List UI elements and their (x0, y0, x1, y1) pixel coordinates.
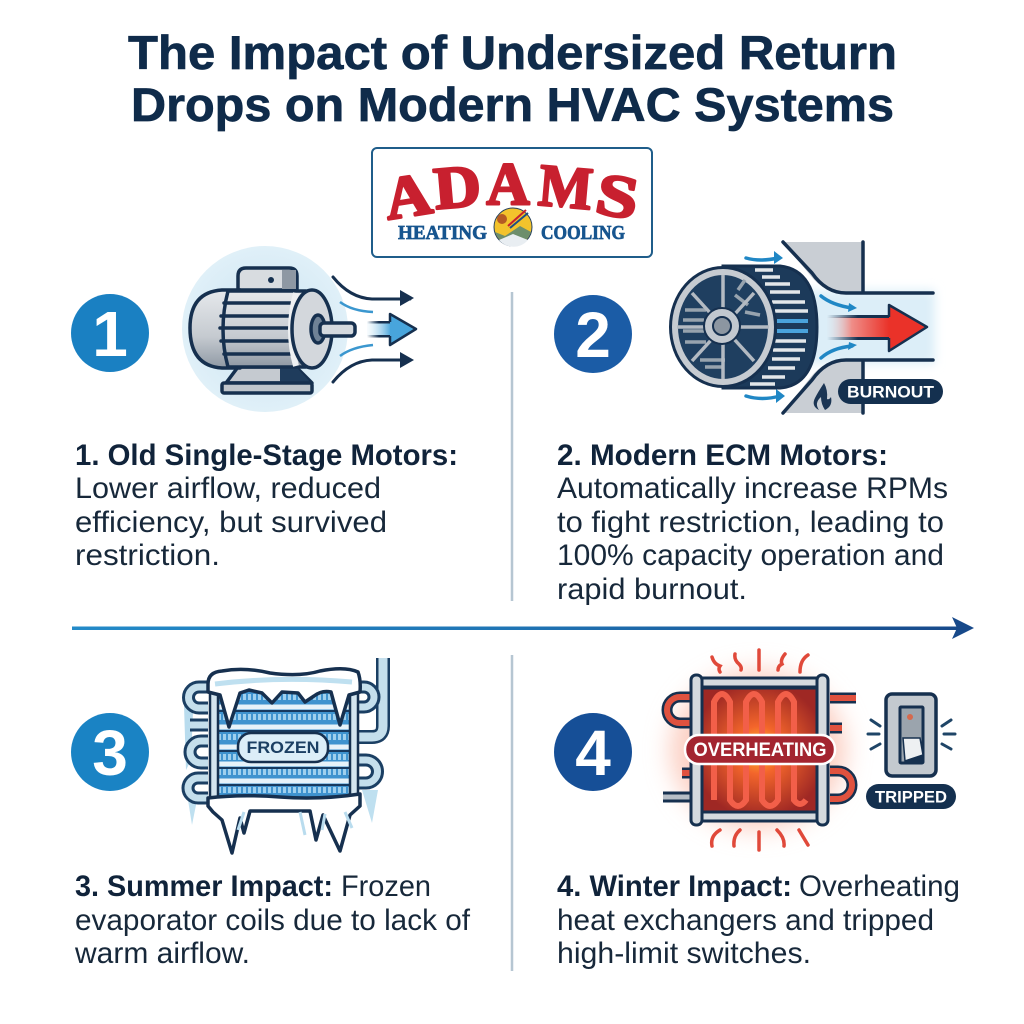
text block 4: high-limit switches. (557, 937, 811, 970)
logo: Adams Heating Cooling: HEATING (398, 222, 487, 244)
arrow: timeline (72, 617, 974, 639)
label: overheating (685, 735, 835, 764)
logo: Adams Heating Cooling: A (379, 159, 436, 233)
label: overheating: OVERHEATING (694, 740, 826, 761)
title (128, 26, 897, 131)
logo: Adams Heating Cooling: M (536, 152, 595, 223)
text block 4: heat exchangers and tripped (557, 904, 934, 937)
text block 2: 2. Modern ECM Motors: (557, 439, 888, 472)
label: tripped: TRIPPED (875, 788, 947, 806)
text block 3: warm airflow. (74, 937, 250, 970)
panel: modern ECM motors (554, 242, 948, 606)
logo: Adams Heating Cooling (372, 148, 652, 257)
label: burnout (838, 379, 943, 404)
number badge 3 (71, 713, 149, 791)
logo: Adams Heating Cooling: A (486, 151, 530, 217)
icon: overheating heat exchanger (663, 650, 856, 850)
icon: blower wheel in restricted duct (669, 242, 943, 413)
text block 4: Overheating (799, 870, 960, 903)
logo: Adams Heating Cooling: COOLING (541, 222, 625, 244)
text block 4: 4. Winter Impact: (557, 870, 792, 903)
text block 2 (557, 439, 948, 606)
logo emblem (494, 208, 532, 247)
text block 4 (557, 870, 960, 970)
number badge 1 (71, 294, 149, 372)
logo: Adams Heating Cooling: D (431, 151, 483, 222)
title: The Impact of Undersized Return (128, 26, 897, 79)
text block 2: rapid burnout. (557, 573, 747, 606)
dividers (511, 292, 513, 971)
text block 1: 1. Old Single-Stage Motors: (75, 439, 458, 472)
icon: electric motor with airflow (182, 246, 416, 412)
number badge 2 (554, 295, 632, 373)
text block 1: efficiency, but survived (75, 506, 387, 539)
panel: old single-stage motors (71, 246, 458, 572)
text block 2: 100% capacity operation and (557, 539, 944, 572)
number badge 3: 3 (92, 717, 128, 789)
label: frozen (238, 733, 328, 762)
text block 1: restriction. (75, 539, 220, 572)
number badge 2: 2 (575, 299, 611, 371)
text block 3: Frozen (341, 870, 431, 903)
icon: flame (814, 383, 831, 410)
label: frozen: FROZEN (246, 738, 320, 757)
text block 2: to fight restriction, leading to (557, 506, 944, 539)
panel: summer impact (71, 658, 471, 970)
number badge 4 (554, 713, 632, 791)
text block 1 (75, 439, 458, 572)
label: burnout: BURNOUT (847, 382, 935, 402)
text block 3: evaporator coils due to lack of (75, 904, 471, 937)
icon: frozen evaporator coil (184, 658, 383, 853)
logo: Adams Heating Cooling: S (591, 159, 644, 233)
icon: tripped high-limit switch (866, 694, 956, 809)
text block 3: 3. Summer Impact: (75, 870, 333, 903)
text block 1: Lower airflow, reduced (75, 472, 381, 505)
text block 2: Automatically increase RPMs (557, 472, 948, 505)
title: Drops on Modern HVAC Systems (131, 78, 894, 131)
text block 3 (74, 870, 471, 970)
panel: winter impact (554, 650, 960, 970)
number badge 1: 1 (92, 298, 128, 370)
number badge 4: 4 (575, 717, 611, 789)
